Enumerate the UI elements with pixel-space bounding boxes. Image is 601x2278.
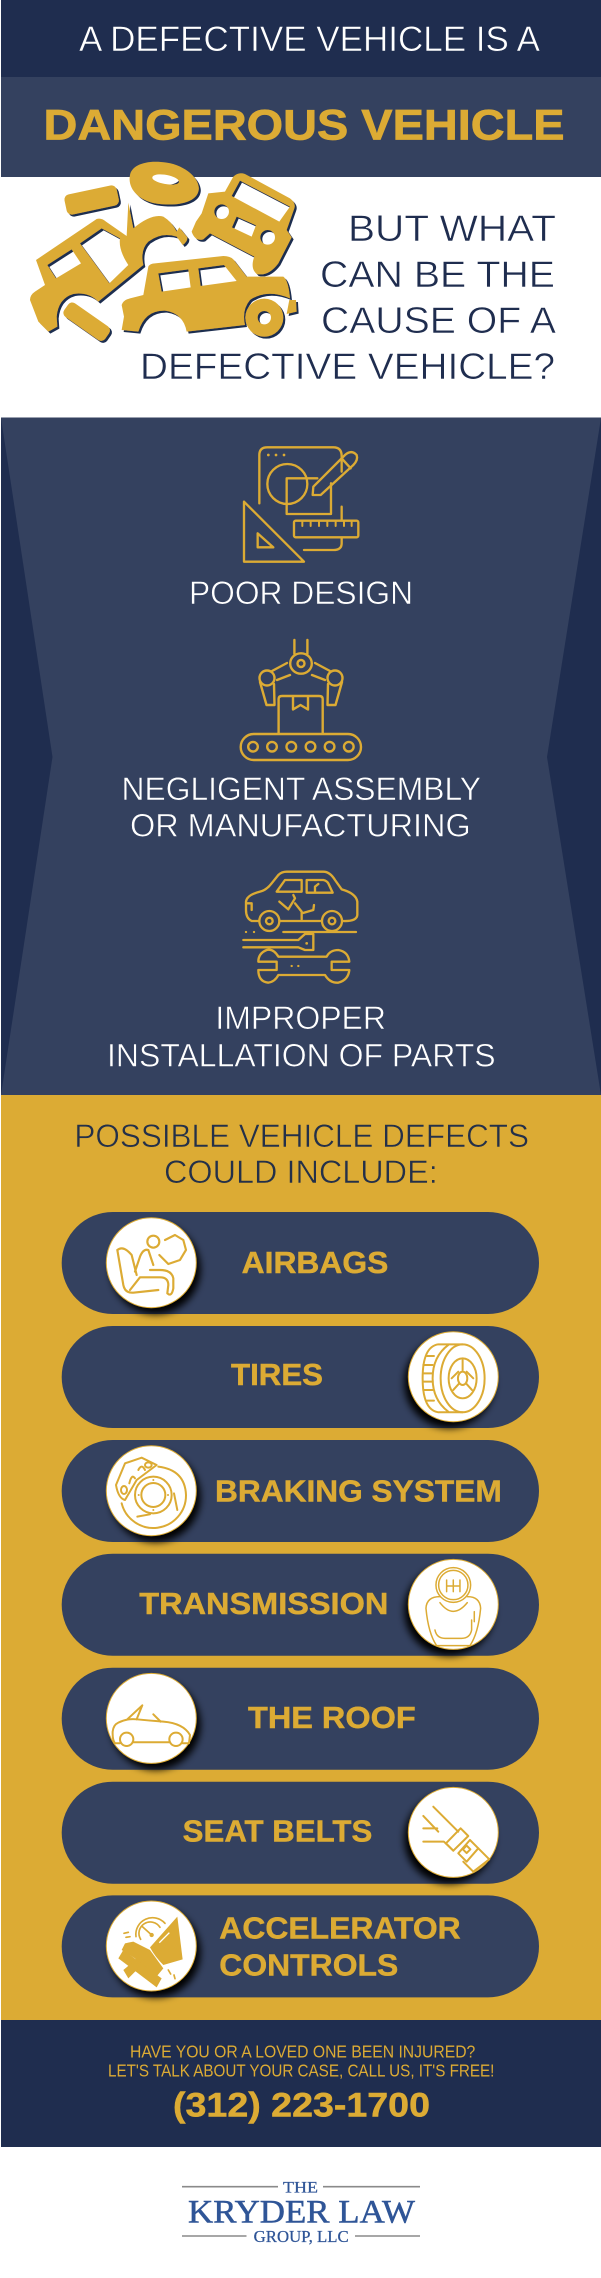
heading: possible vehicle defects [74, 1118, 529, 1190]
illustration: pile of defective cars [30, 162, 297, 343]
question text: DEFECTIVE VEHICLE? [140, 346, 555, 387]
icon: gear shift [426, 1568, 481, 1646]
label: negligent assembly or manufacturing [122, 771, 481, 844]
defect: seat belts: SEAT BELTS [183, 1815, 372, 1849]
defect: airbags: AIRBAGS [242, 1246, 388, 1280]
logo: the kryder law group: KRYDER LAW [188, 2194, 416, 2230]
label: improper installation of parts [107, 1000, 496, 1074]
icon: tire [423, 1344, 485, 1412]
left car [30, 203, 187, 332]
defect: braking system [62, 1440, 539, 1542]
question text: CAN BE THE [320, 254, 555, 295]
defect: accelerator controls [62, 1895, 539, 1997]
logo: the kryder law group [182, 2179, 420, 2246]
defect: tires: TIRES [231, 1358, 323, 1392]
logo: the kryder law group: GROUP, LLC [254, 2227, 349, 2246]
label: negligent assembly or manufacturing: OR MANUFACTURING [130, 808, 471, 844]
icon: broken car and wrenches [243, 872, 357, 983]
defect: braking system: BRAKING SYSTEM [215, 1475, 502, 1509]
defect: airbags [62, 1212, 539, 1314]
defect: accelerator controls: CONTROLS [219, 1949, 398, 1983]
footer text: HAVE YOU OR A LOVED ONE BEEN INJURED? [130, 2042, 476, 2062]
defect: the roof: THE ROOF [248, 1701, 416, 1735]
defect: tires [62, 1326, 539, 1428]
tire [130, 162, 199, 205]
question text: BUT WHAT [348, 208, 556, 249]
loose bar bottom [61, 300, 112, 343]
bottom car [122, 256, 290, 332]
icon: airbag [117, 1235, 186, 1295]
defect: accelerator controls: ACCELERATOR [219, 1911, 461, 1945]
label: poor design: POOR DESIGN [189, 575, 413, 611]
icon: convertible car [113, 1705, 190, 1746]
defect: the roof [62, 1668, 539, 1770]
icon: design tools [244, 447, 358, 562]
label: negligent assembly or manufacturing: NEGLIGENT ASSEMBLY [122, 771, 481, 807]
title: dangerous vehicle: DANGEROUS VEHICLE [44, 102, 564, 150]
title band [1, 77, 601, 177]
heading: possible vehicle defects: COULD INCLUDE: [164, 1154, 438, 1190]
header band [1, 0, 601, 77]
icon: accelerator pedal [118, 1917, 183, 1987]
footer text: LET'S TALK ABOUT YOUR CASE, CALL US, IT'S FREE! [108, 2061, 494, 2081]
footer: call to action [1, 2020, 601, 2147]
icon: robot arm conveyor [241, 640, 361, 760]
defect: transmission [62, 1554, 539, 1656]
defect: seat belts [62, 1782, 539, 1884]
question text [140, 208, 556, 387]
header line: a defective vehicle is a: A DEFECTIVE VEHICLE IS A [79, 20, 541, 59]
icon: brake disc [116, 1458, 186, 1528]
panel: possible defects [1, 1095, 601, 2020]
footer text [108, 2042, 494, 2081]
logo: the kryder law group: THE [283, 2179, 318, 2196]
label: improper installation of parts: INSTALLATION OF PARTS [107, 1038, 496, 1074]
label: improper installation of parts: IMPROPER [215, 1000, 386, 1036]
heading: possible vehicle defects: POSSIBLE VEHICLE DEFECTS [74, 1118, 529, 1154]
phone number: (312) 223-1700 [173, 2087, 430, 2125]
panel: causes [1, 418, 601, 1096]
right car [192, 173, 295, 274]
icon: seat belt buckle [423, 1807, 489, 1872]
loose bar top [63, 184, 120, 216]
question text: CAUSE OF A [321, 300, 556, 341]
defect: transmission: TRANSMISSION [139, 1587, 388, 1621]
